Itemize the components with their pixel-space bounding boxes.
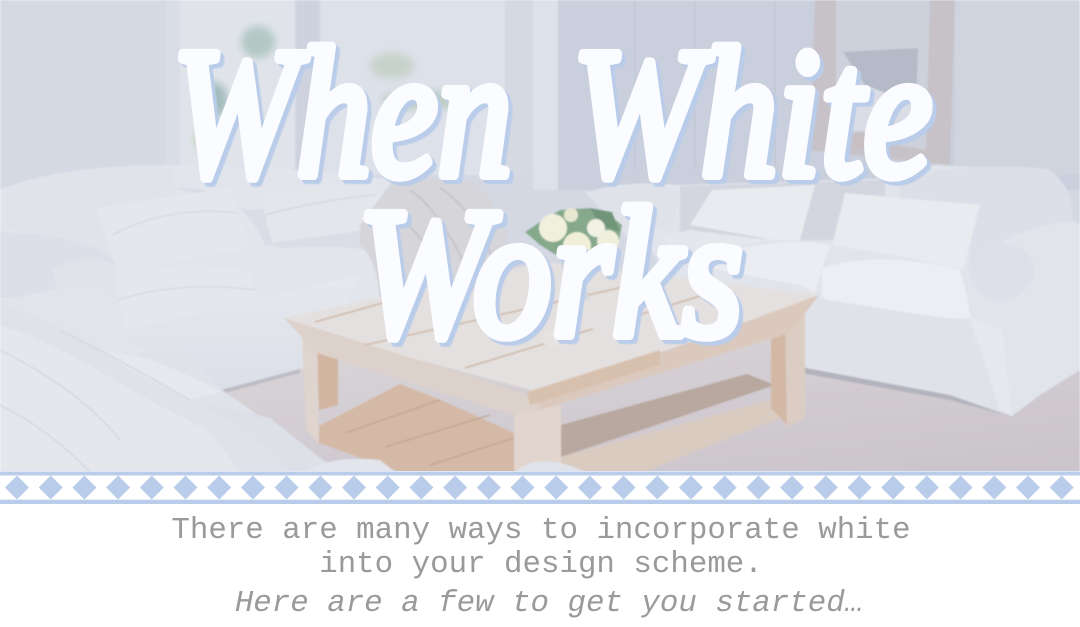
flower bouquet xyxy=(524,207,622,256)
title: When White Works xyxy=(172,11,932,376)
legs xyxy=(302,335,319,443)
wall xyxy=(0,174,1080,340)
lower shelf xyxy=(318,384,514,471)
apron xyxy=(284,318,540,415)
basket xyxy=(483,260,486,264)
mirror xyxy=(810,0,955,165)
decorative band with diamonds xyxy=(0,471,1080,505)
intro text xyxy=(171,513,911,621)
panelled wall right xyxy=(558,0,1080,190)
back left sofa xyxy=(0,165,400,390)
floor xyxy=(226,340,1080,471)
vase xyxy=(560,262,590,300)
coffee table xyxy=(284,262,819,483)
intro text: There are many ways to incorporate white xyxy=(171,513,911,548)
table top xyxy=(284,262,819,392)
left window xyxy=(180,0,294,170)
intro text: into your design scheme. xyxy=(319,547,763,582)
title: When White Works: When xyxy=(172,11,512,216)
throw blanket xyxy=(360,181,518,297)
background photo: white living room xyxy=(0,0,1080,483)
title: When White Works: Works xyxy=(357,171,743,376)
centre window xyxy=(296,0,559,190)
shadow under right sofa xyxy=(804,368,997,413)
back right sofa xyxy=(585,165,1080,416)
small dish xyxy=(544,338,558,345)
sofa shadow xyxy=(221,369,300,394)
italic lead-in line: Here are a few to get you started… xyxy=(235,586,863,621)
front left sofa xyxy=(0,302,584,471)
title: When White Works: White xyxy=(572,11,932,216)
